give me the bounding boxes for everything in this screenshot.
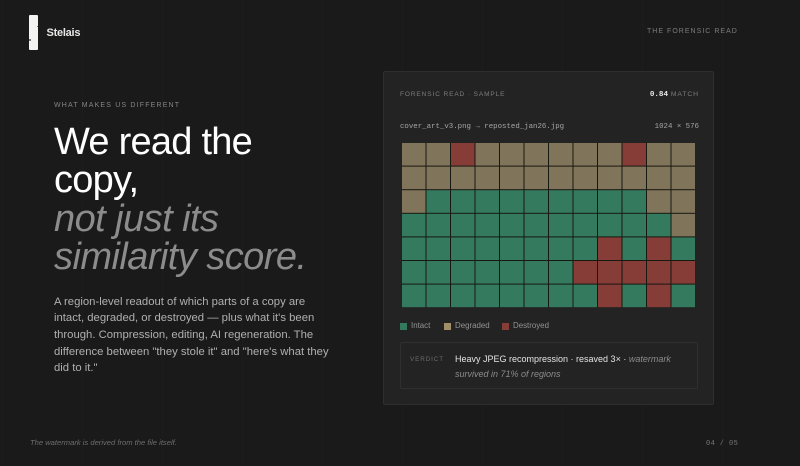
verdict box <box>400 342 698 389</box>
logo mark <box>29 15 38 50</box>
footer note: The watermark is derived from the file itself. <box>30 438 177 447</box>
section tag: THE FORENSIC READ <box>647 28 738 35</box>
match score: 0.84 MATCH <box>650 90 699 98</box>
verdict text: Heavy JPEG recompression · resaved 3× · watermark <box>455 354 671 364</box>
brand name: Stelais <box>46 26 80 38</box>
eyebrow: WHAT MAKES US DIFFERENT <box>54 102 180 109</box>
file names: cover_art_v3.png → reposted_jan26.jpg <box>400 123 564 131</box>
body text: did to it." <box>54 362 98 374</box>
legend: destroyed: Destroyed <box>513 321 549 330</box>
body text: through. Compression, editing, AI regeneration. The <box>54 329 313 341</box>
legend: degraded: Degraded <box>455 321 490 330</box>
dimensions: 1024 × 576 <box>655 123 699 131</box>
body text <box>54 296 329 374</box>
headline: copy, <box>54 159 138 201</box>
verdict text <box>455 354 672 379</box>
body text: A region-level readout of which parts of a copy are <box>54 296 305 308</box>
legend <box>400 321 549 330</box>
panel heading: FORENSIC READ · SAMPLE <box>400 90 505 98</box>
headline <box>54 121 306 278</box>
panel: forensic read <box>383 71 714 405</box>
headline: not just its <box>54 198 218 240</box>
page number: 04 / 05 <box>706 440 738 448</box>
verdict label: VERDICT <box>410 356 444 363</box>
headline: We read the <box>54 121 252 163</box>
heatmap grid <box>402 143 695 308</box>
headline: similarity score. <box>54 236 306 278</box>
verdict text: survived in 71% of regions <box>455 369 561 379</box>
legend: intact <box>400 321 430 330</box>
legend: intact: Intact <box>411 321 430 330</box>
body text: difference between "they stole it" and "here's what they <box>54 346 329 358</box>
body text: intact, degraded, or destroyed — plus what it's been <box>54 312 314 324</box>
